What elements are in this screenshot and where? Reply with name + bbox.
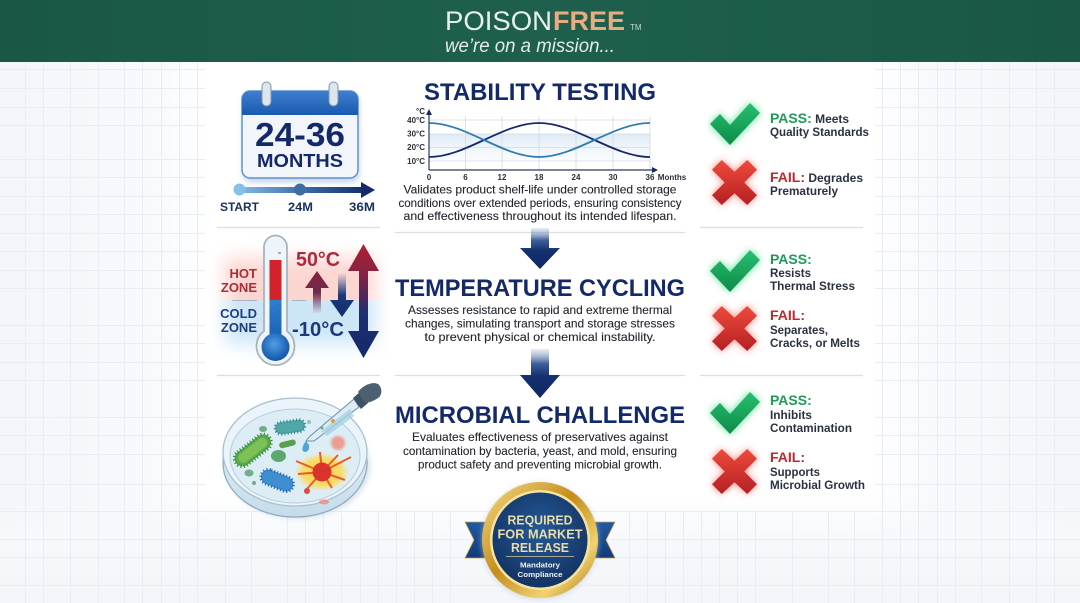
heading: microbial challenge: MICROBIAL CHALLENGE xyxy=(395,402,685,429)
text: stability description: Validates product shelf-life under controlled storage xyxy=(404,182,677,196)
timeline labels: 36M xyxy=(349,202,375,214)
stability fail text: FAIL: Degrades xyxy=(770,169,863,185)
line chart: temperature over months xyxy=(407,107,687,182)
chart y-axis labels: 30°C xyxy=(407,130,425,138)
text: temperature description: to prevent physical or chemical instability. xyxy=(424,330,656,344)
label: 50 C: 50°C xyxy=(296,249,340,271)
zone labels: ZONE xyxy=(221,280,257,295)
stability pass text xyxy=(770,110,869,139)
text: stability description xyxy=(398,182,682,223)
temperature fail text: FAIL: xyxy=(770,307,805,323)
temperature fail text xyxy=(770,307,860,350)
badge subtext xyxy=(518,560,562,579)
chart x-axis labels: 36 xyxy=(646,173,655,182)
panel: stability results xyxy=(710,103,869,205)
icon: pass check xyxy=(710,392,760,434)
microbial pass text: PASS: xyxy=(770,392,812,408)
heading: temperature cycling: TEMPERATURE CYCLING xyxy=(395,275,685,302)
calendar number: 24-36 xyxy=(255,116,345,153)
chart x-axis labels: 0 xyxy=(427,173,432,182)
chart x-axis labels: 24 xyxy=(572,173,581,182)
chart x-axis labels: Months xyxy=(658,173,687,182)
arrow: heat up xyxy=(305,271,329,314)
ribbon xyxy=(465,522,615,558)
tagline: we’re on a mission... xyxy=(445,36,615,57)
microbial pass text: Contamination xyxy=(770,421,852,435)
temperature pass text xyxy=(770,251,855,293)
chart x-axis labels: 12 xyxy=(498,173,507,182)
chart y-axis labels: °C xyxy=(416,107,425,116)
temperature pass text: PASS: xyxy=(770,251,812,267)
timeline labels: 24M xyxy=(288,202,313,214)
logo wordmark: POISON xyxy=(445,6,552,36)
panel: temperature results xyxy=(710,250,860,351)
arrow: temperature range xyxy=(348,244,379,358)
icon: petri dish with microbes xyxy=(223,383,381,518)
microbial fail text: FAIL: xyxy=(770,449,805,465)
timeline labels xyxy=(220,202,375,214)
icon: thermometer xyxy=(232,236,306,365)
microbe: green rod xyxy=(231,431,274,470)
microbe: blue rod xyxy=(259,467,296,494)
temperature fail text: Cracks, or Melts xyxy=(770,336,860,350)
text: stability description: and effectiveness throughout its intended lifespan. xyxy=(404,209,676,223)
chart x-axis labels xyxy=(427,173,687,182)
text: stability description: conditions over extended periods, ensuring consistency xyxy=(398,196,682,210)
chart y-axis labels: 10°C xyxy=(407,157,425,166)
icon: fail cross xyxy=(712,160,757,205)
zone labels: HOT xyxy=(230,266,257,281)
label: -10 C: -10°C xyxy=(292,319,344,341)
microbial fail text xyxy=(770,449,865,492)
stability fail text xyxy=(770,169,863,198)
logo FREE: FREE xyxy=(553,6,625,36)
text: microbial description: product safety and preventing microbial growth. xyxy=(418,458,662,472)
timeline labels: START xyxy=(220,202,259,214)
timeline arrow xyxy=(220,182,375,214)
temperature fail text: Separates, xyxy=(770,323,828,337)
text: temperature description xyxy=(405,303,675,344)
icon: fail cross xyxy=(712,306,757,351)
chart y-axis labels xyxy=(407,107,425,166)
dropper xyxy=(302,383,381,452)
badge subtext: Mandatory xyxy=(520,560,561,570)
badge text: FOR MARKET xyxy=(498,528,583,542)
icon: flow arrow 1 xyxy=(520,228,560,269)
stability pass text: PASS: Meets xyxy=(770,110,849,126)
arrow: cool down xyxy=(330,273,354,317)
icon: calendar 24-36 months xyxy=(242,82,359,182)
temperature pass text: Resists xyxy=(770,266,811,280)
text: microbial description: contamination by bacteria, yeast, and mold, ensuring xyxy=(403,444,677,458)
badge subtext: Compliance xyxy=(518,570,562,579)
microbes: small green blobs xyxy=(244,420,311,485)
mold splat xyxy=(295,436,351,504)
zone labels xyxy=(220,266,257,335)
calendar unit: MONTHS xyxy=(257,150,343,171)
badge text xyxy=(498,514,583,555)
stability pass text: Quality Standards xyxy=(770,125,869,139)
dividers xyxy=(217,228,863,376)
chart x-axis labels: 6 xyxy=(463,173,468,182)
hot and cold zones background xyxy=(225,258,375,344)
header band xyxy=(0,0,1080,62)
icon: fail cross xyxy=(712,449,757,494)
microbe: teal rod xyxy=(274,419,306,435)
microbial fail text: Microbial Growth xyxy=(770,478,865,492)
microbial pass text xyxy=(770,392,852,435)
text: temperature description: Assesses resistance to rapid and extreme thermal xyxy=(408,303,672,317)
temperature pass text: Thermal Stress xyxy=(770,279,855,293)
zone labels: ZONE xyxy=(221,320,257,335)
badge: required for market release xyxy=(465,482,615,599)
panel: microbial results xyxy=(710,392,865,494)
badge text: RELEASE xyxy=(511,541,569,555)
zone labels: COLD xyxy=(220,306,257,321)
text: microbial description: Evaluates effectiveness of preservatives against xyxy=(412,430,669,444)
chart x-axis labels: 30 xyxy=(609,173,618,182)
microbial fail text: Supports xyxy=(770,465,820,479)
icon: pass check xyxy=(710,250,760,292)
stability fail text: Prematurely xyxy=(770,184,838,198)
text: temperature description: changes, simulating transport and storage stresses xyxy=(405,316,675,330)
text: microbial description xyxy=(403,430,677,472)
badge text: REQUIRED xyxy=(508,514,572,528)
icon: flow arrow 2 xyxy=(520,349,560,398)
chart x-axis labels: 18 xyxy=(535,173,544,182)
icon: pass check xyxy=(710,103,760,145)
chart y-axis labels: 40°C xyxy=(407,116,425,125)
microbial pass text: Inhibits xyxy=(770,408,812,422)
chart y-axis labels: 20°C xyxy=(407,143,425,152)
heading: stability testing: STABILITY TESTING xyxy=(424,79,656,106)
trademark: TM xyxy=(630,23,642,32)
